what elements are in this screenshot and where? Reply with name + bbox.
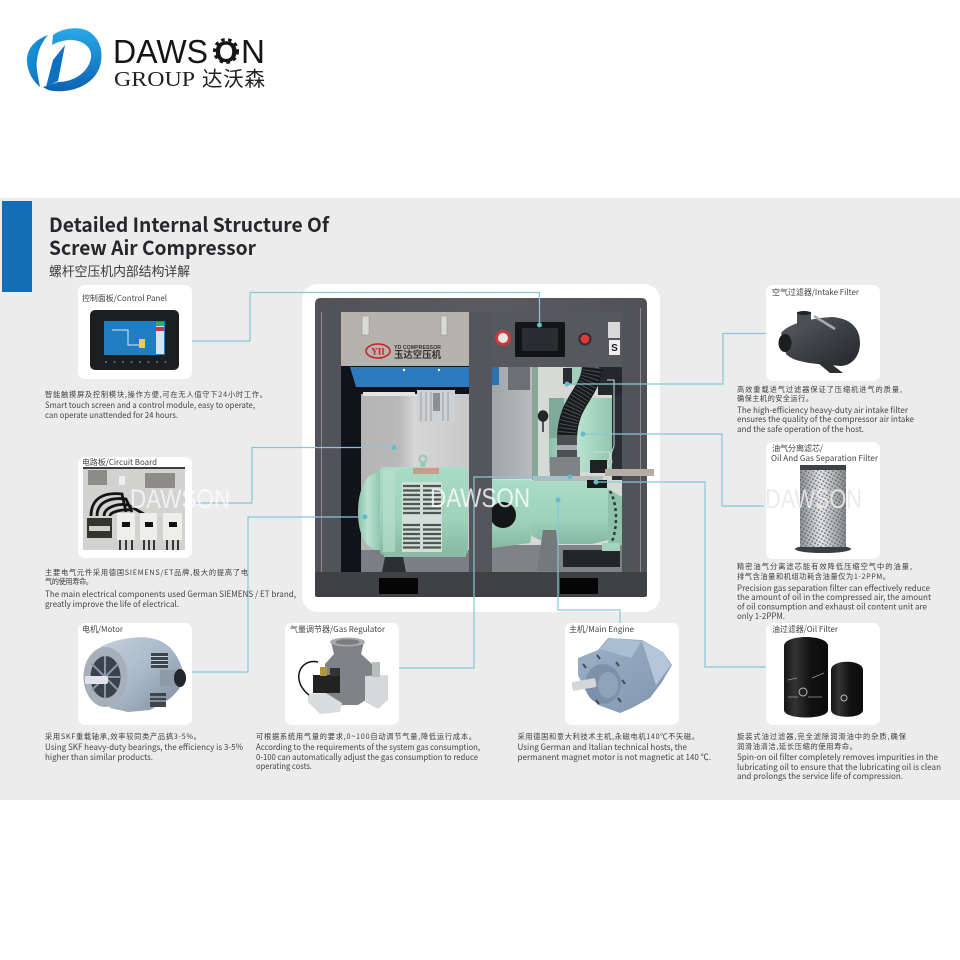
base — [315, 572, 647, 597]
icon: electrical cabinet — [83, 467, 185, 550]
panel: control panel: 控制面板/Control Panel — [82, 292, 167, 304]
description: Precision gas separation filter can effectively reduce — [737, 582, 930, 594]
description: Smart touch screen and a control module, easy to operate, — [45, 399, 255, 411]
icon: gas regulator valve — [299, 638, 388, 714]
description: the amount of oil in the compressed air, the amount — [737, 591, 932, 603]
motor in left bay — [358, 456, 468, 572]
compressor machine — [315, 298, 654, 597]
description — [737, 732, 941, 782]
description — [737, 385, 914, 435]
panel: oil and gas separation filter — [737, 442, 932, 622]
connector: oil and gas filter — [580, 432, 764, 506]
watermark: right: DAWSON — [765, 484, 862, 514]
description: 采用SKF重载轴承,效率较同类产品搞3-5%。 — [45, 732, 201, 742]
description: can operate unattended for 24 hours. — [45, 409, 178, 421]
icon: air intake filter — [778, 311, 860, 373]
description: 采用德国和意大利技术主机,永磁电机140℃不矢磁。 — [518, 732, 699, 742]
panel: control panel — [45, 285, 267, 421]
logo: Dawson Group — [27, 28, 266, 92]
control panel fascia: S — [611, 343, 618, 354]
blue heading tab — [2, 201, 32, 292]
title: Detailed Internal Structure Of — [49, 209, 330, 238]
description: The main electrical components used German SIEMENS / ET brand, — [45, 588, 296, 600]
panel: motor: 电机/Motor — [82, 623, 124, 635]
description: 确保主机的安全运行。 — [737, 394, 813, 404]
nameplate: YII — [371, 346, 385, 356]
group name: GROUP — [114, 67, 195, 91]
description: higher than similar products. — [45, 751, 153, 763]
description: and prolongs the service life of compression. — [737, 770, 903, 782]
description: 主要电气元件采用德国SIEMENS/ET品牌,极大的提高了电 — [45, 568, 248, 578]
nameplate: 玉达空压机 — [394, 347, 442, 361]
wordmark: O — [214, 36, 238, 69]
description — [256, 732, 480, 772]
description: 旋装式油过滤器,完全滤除润滑油中的杂质,确保 — [737, 732, 907, 742]
description: ensures the quality of the compressor air intake — [737, 413, 914, 425]
description: and the safe operation of the host. — [737, 423, 864, 435]
connector: gas regulator — [399, 474, 572, 668]
icon: screw air end — [571, 638, 672, 713]
air hose — [567, 367, 592, 438]
logo: Dawson Group: 达沃森 — [202, 62, 266, 92]
description: greatly improve the life of electrical. — [45, 598, 179, 610]
icon: electric motor — [84, 637, 186, 712]
panel: oil and gas separation filter: Oil And Gas Separation Filter — [771, 452, 879, 464]
description — [737, 562, 932, 622]
icon: Dawson D emblem — [27, 28, 102, 91]
description: only 1-2PPM. — [737, 610, 785, 622]
panel: intake filter — [737, 285, 914, 435]
description: 精密油气分离滤芯能有效降低压缩空气中的油量, — [737, 562, 912, 572]
description: Using German and Italian technical hosts, the — [518, 741, 687, 753]
right bay — [490, 367, 622, 572]
description: Using SKF heavy-duty bearings, the efficiency is 3-5% — [45, 741, 243, 753]
nameplate — [341, 312, 469, 366]
description: Spin-on oil filter completely removes impurities in the — [737, 751, 938, 763]
description: permanent magnet motor is not magnetic at 140 ℃. — [518, 751, 711, 763]
watermark: left: DAWSON — [130, 484, 230, 514]
separator tank — [549, 398, 612, 472]
title: Screw Air Compressor — [49, 232, 256, 261]
description: 0-100 can automatically adjust the gas consumption to reduce — [256, 751, 478, 763]
description: 智能触摸屏及控制模块,操作方便,可在无人值守下24小时工作。 — [45, 390, 267, 400]
description: operating costs. — [256, 760, 312, 772]
panel: oil filter: 油过滤器/Oil Filter — [772, 623, 839, 635]
control panel fascia — [492, 312, 622, 367]
left bay — [341, 312, 469, 572]
description: of oil consumption and exhaust oil content unit are — [737, 600, 927, 612]
icon: spin-on oil filters — [784, 637, 863, 718]
panel: gas regulator: 气量调节器/Gas Regulator — [290, 623, 386, 635]
description: The high-efficiency heavy-duty air intake filter — [737, 404, 909, 416]
panel: circuit board: 电路板/Circuit Board — [82, 456, 157, 468]
wordmark: DAWS — [113, 33, 208, 70]
icon: separator filter — [795, 465, 851, 553]
description: 润滑油清洁,延长压缩的使用寿命。 — [737, 742, 857, 752]
description — [518, 732, 711, 763]
description — [45, 568, 296, 610]
connector: motor — [192, 514, 368, 672]
icon: touch screen — [90, 310, 179, 370]
description: 排气含油量和机组功耗含油量仅为1-2PPM。 — [737, 572, 890, 582]
air end — [533, 476, 603, 481]
panel: oil filter — [737, 623, 941, 782]
connector: oil filter — [594, 480, 766, 667]
panel: oil and gas separation filter: 油气分离滤芯/ — [772, 442, 824, 454]
connector: circuit board — [196, 445, 396, 503]
white backing behind machine — [302, 284, 660, 612]
panel: intake filter: 空气过滤器/Intake Filter — [772, 286, 860, 298]
connector: control panel — [192, 292, 542, 341]
title — [49, 209, 330, 280]
description — [45, 732, 243, 763]
connector: main engine — [556, 498, 620, 623]
description — [45, 390, 267, 421]
watermark: centre: DAWSON — [430, 483, 530, 513]
nameplate: YD COMPRESSOR — [394, 345, 441, 351]
panel: circuit board — [45, 456, 296, 610]
description: 可根据系统用气量的要求,0~100自动调节气量,降低运行成本。 — [256, 732, 476, 742]
description: 气的使用寿命。 — [45, 577, 93, 587]
panel: gray background — [0, 198, 960, 800]
wordmark: N — [241, 33, 265, 70]
description: lubricating oil to ensure that the lubricating oil is clean — [737, 761, 941, 773]
title: 螺杆空压机内部结构详解 — [49, 261, 190, 280]
panel: motor — [45, 623, 243, 763]
panel: main engine — [518, 623, 711, 763]
handle bar — [605, 469, 654, 476]
description: According to the requirements of the system gas consumption, — [256, 741, 480, 753]
centre post — [469, 312, 492, 572]
description: 高效重载进气过滤器保证了压缩机进气的质量, — [737, 385, 902, 395]
connector: intake filter — [564, 334, 766, 386]
panel: gas regulator — [256, 623, 480, 772]
panel: main engine: 主机/Main Engine — [569, 623, 634, 635]
